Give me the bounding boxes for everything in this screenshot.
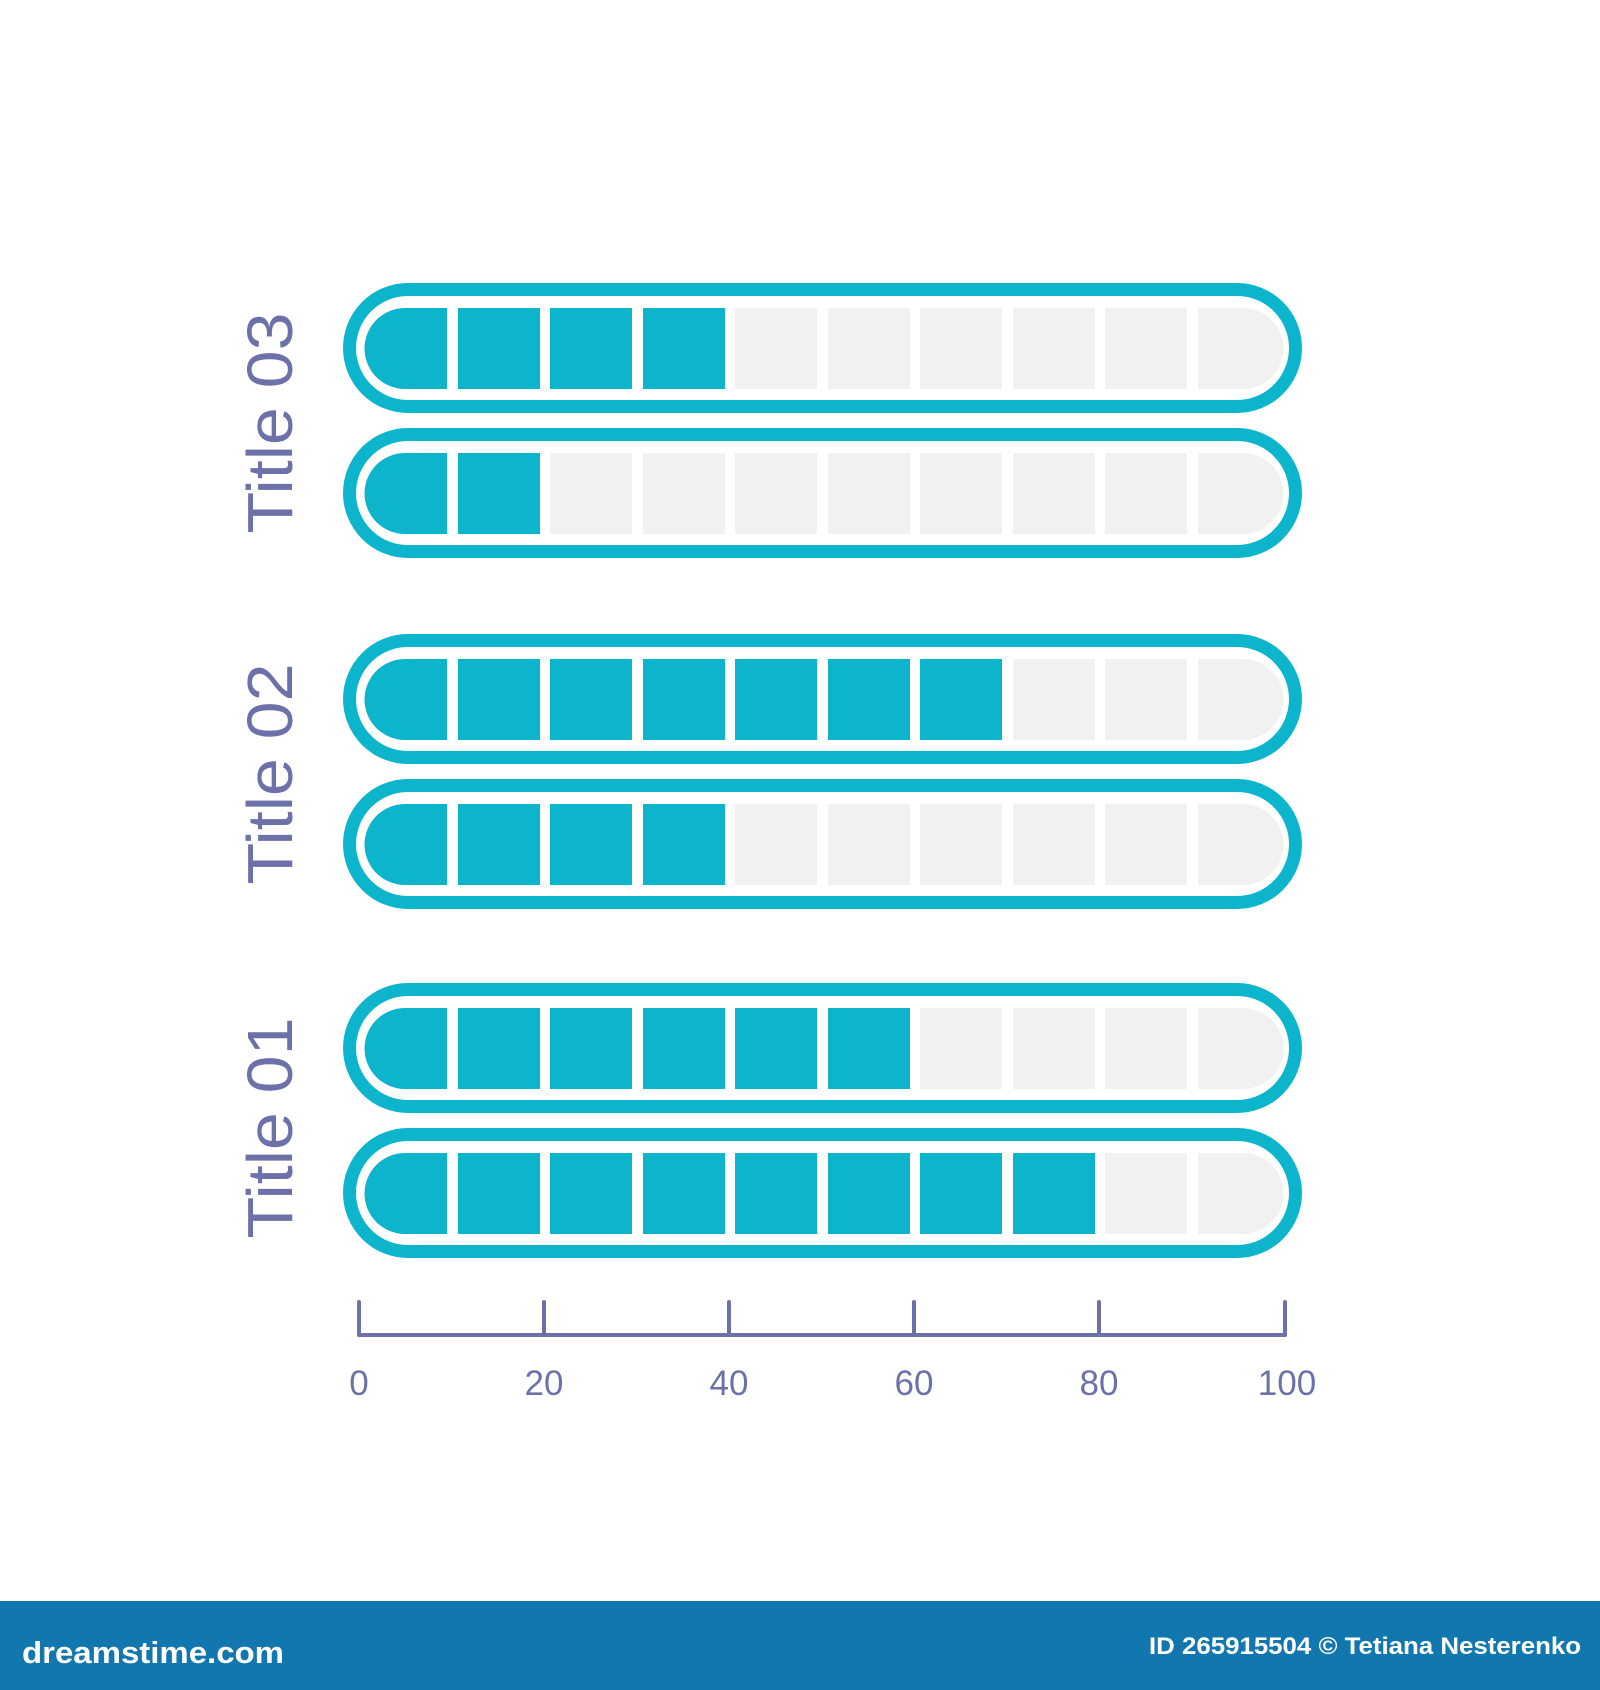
title: Title 02: Title 02 (234, 664, 306, 884)
axis (359, 1302, 1285, 1335)
axis labels: 20 (525, 1364, 563, 1403)
footer bar (0, 1601, 1600, 1690)
footer: site name: dreamstime.com (22, 1635, 284, 1670)
bar: Title 01 A (60) (350, 990, 1296, 1106)
bar: Title 02 B (40) (350, 786, 1296, 902)
footer: credit: ID 265915504 © Tetiana Nesterenko (1149, 1633, 1581, 1660)
title: Title 01: Title 01 (234, 1018, 306, 1238)
bar: Title 02 A (70) (350, 640, 1296, 758)
axis labels: 60 (895, 1364, 933, 1403)
bar: Title 01 B (80) (350, 1134, 1296, 1252)
axis labels: 40 (710, 1364, 748, 1403)
axis labels: 100 (1258, 1364, 1316, 1403)
title: Title 03: Title 03 (234, 312, 306, 534)
axis labels (349, 1364, 1316, 1403)
axis labels: 80 (1080, 1364, 1118, 1403)
bar: Title 03 B (20) (350, 434, 1296, 552)
axis labels: 0 (349, 1364, 369, 1403)
bar: Title 03 A (40) (350, 290, 1296, 406)
